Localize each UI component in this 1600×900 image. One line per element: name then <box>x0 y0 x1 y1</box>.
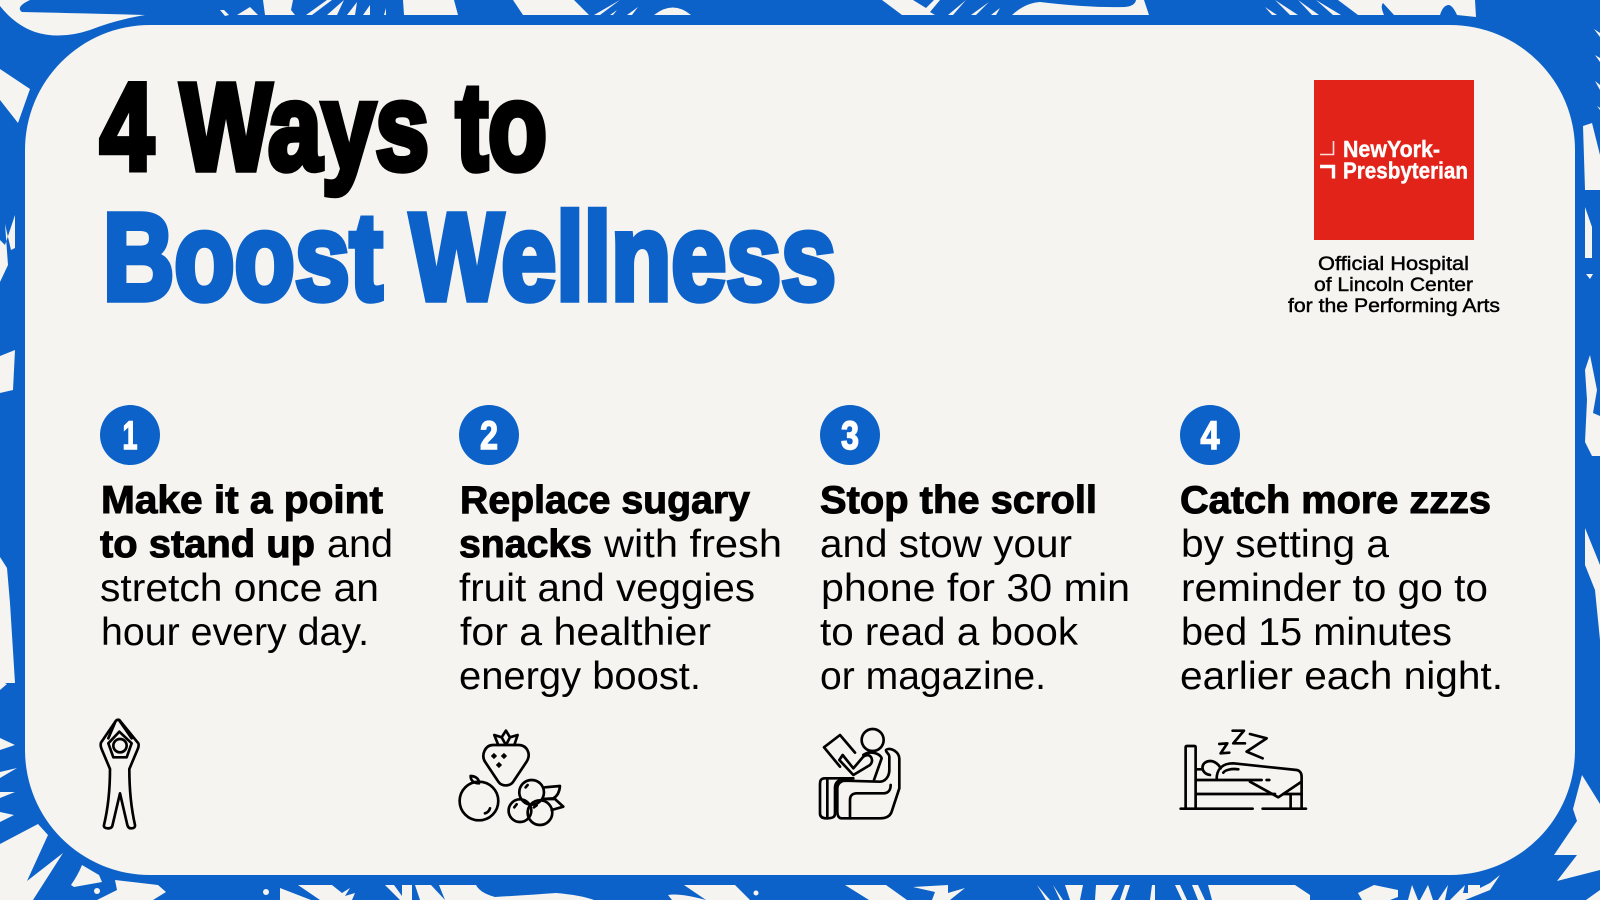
tip 4 text: earlier each night. <box>1180 655 1503 698</box>
logo: NewYork-Presbyterian: Presbyterian <box>1343 158 1468 184</box>
panel: tip 1 <box>100 405 393 828</box>
logo caption: Official Hospital <box>1318 253 1469 275</box>
tip 3 text: to read a book <box>820 611 1079 654</box>
tip 1 text: Make it a point <box>101 479 383 522</box>
logo: NewYork-Presbyterian: NewYork- <box>1343 136 1440 162</box>
tip 3 text: or magazine. <box>820 655 1046 698</box>
tip 2 text: energy boost. <box>459 655 701 698</box>
tip 1 text <box>100 479 393 654</box>
icon: sleeping in bed <box>1181 731 1306 809</box>
tip 2 text: snacks <box>459 523 592 566</box>
tip 3 text: and stow your <box>820 523 1072 566</box>
title line 2: Boost Wellness <box>103 190 836 326</box>
number badge 1 <box>100 405 160 465</box>
tip 4 text: bed 15 minutes <box>1181 611 1452 654</box>
tip 2 text: for a healthier <box>460 611 711 654</box>
number badge 1: 1 <box>122 414 138 458</box>
tip 3 text: phone for 30 min <box>821 567 1130 610</box>
tip 4 text: reminder to go to <box>1181 567 1488 610</box>
logo: NewYork-Presbyterian <box>1314 80 1474 240</box>
number badge 2: 2 <box>480 414 498 458</box>
number badge 3 <box>820 405 880 465</box>
panel: tip 4 <box>1180 405 1503 809</box>
icon: fruit <box>460 731 563 825</box>
title <box>100 60 836 326</box>
tip 3 text <box>820 479 1130 698</box>
logo caption: of Lincoln Center <box>1314 274 1474 296</box>
tip 2 text <box>459 479 782 698</box>
tip 1 text: hour every day. <box>101 611 369 654</box>
number badge 4 <box>1180 405 1240 465</box>
tip 3 text: Stop the scroll <box>820 479 1097 522</box>
logo caption <box>1288 253 1500 317</box>
number badge 3: 3 <box>841 414 859 458</box>
logo caption: for the Performing Arts <box>1288 295 1500 317</box>
title line 1: 4 Ways to <box>100 60 547 196</box>
number badge 4: 4 <box>1200 414 1220 458</box>
number badge 2 <box>459 405 519 465</box>
panel: tip 2 <box>459 405 782 825</box>
tip 2 text: fruit and veggies <box>459 567 755 610</box>
tip 4 text: Catch more zzzs <box>1180 479 1491 522</box>
tip 1 text: to stand up <box>100 523 315 566</box>
tip 2 text: with fresh <box>603 523 782 566</box>
tip 4 text <box>1180 479 1503 698</box>
icon: stretching person <box>101 720 139 828</box>
icon: person reading <box>820 729 899 818</box>
tip 1 text: and <box>327 523 393 566</box>
tip 2 text: Replace sugary <box>460 479 750 522</box>
panel: tip 3 <box>820 405 1130 818</box>
tip 1 text: stretch once an <box>100 567 379 610</box>
tip 4 text: by setting a <box>1181 523 1389 566</box>
